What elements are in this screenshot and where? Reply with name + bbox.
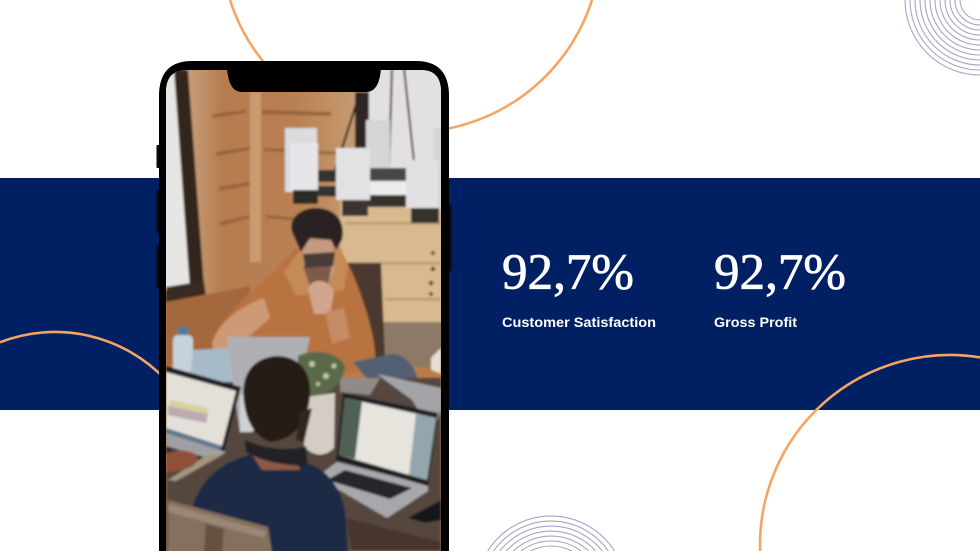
photo: far laptop <box>227 337 310 432</box>
phone body <box>159 61 449 551</box>
concentric rings top right <box>905 0 980 75</box>
stat label: Customer Satisfaction <box>502 314 656 330</box>
stat label: Gross Profit <box>714 314 797 330</box>
photo: window on left <box>164 66 190 290</box>
photo: table <box>166 378 441 551</box>
photo: chandelier <box>285 68 442 223</box>
photo: hand <box>166 451 198 473</box>
stat: customer satisfaction <box>502 245 656 330</box>
phone notch <box>227 68 381 92</box>
photo: water bottle <box>173 327 193 373</box>
phone screen photo <box>164 66 443 551</box>
photo: plant in vase <box>298 352 345 455</box>
phone side buttons <box>156 145 452 288</box>
stat value: 92,7% <box>502 245 634 301</box>
phone mockup <box>156 61 452 551</box>
photo: wooden wall <box>186 66 368 306</box>
photo: main laptop <box>317 393 441 551</box>
photo: chair behind man <box>348 263 385 358</box>
photo: man in navy shirt <box>168 356 348 551</box>
concentric rings bottom centre <box>488 516 614 551</box>
photo: man in orange hoodie <box>212 208 418 382</box>
navy band <box>0 178 980 410</box>
photo: left laptop <box>166 366 241 481</box>
stat value: 92,7% <box>714 245 846 301</box>
stat: gross profit <box>714 245 846 330</box>
photo: person right edge <box>431 348 441 374</box>
photo: bright window upper right <box>368 66 443 200</box>
photo: log wall <box>338 200 441 324</box>
